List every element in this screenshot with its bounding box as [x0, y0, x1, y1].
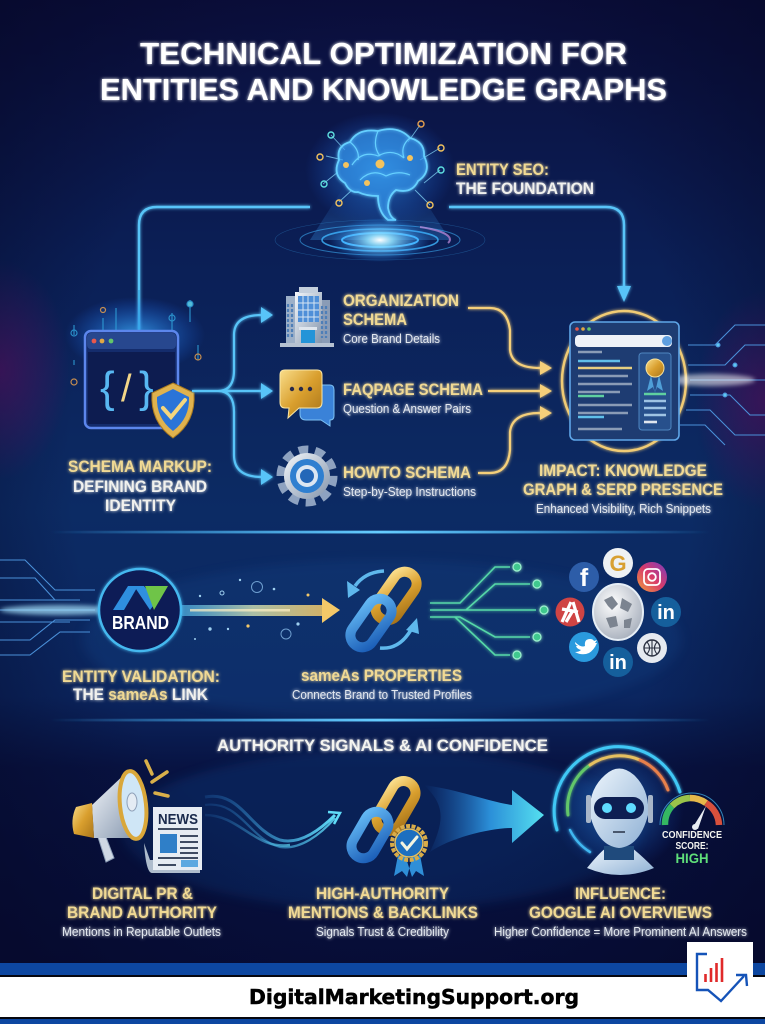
rings: [554, 747, 680, 852]
text: faqpage schema: [343, 381, 483, 416]
text: high-authority: MENTIONS & BACKLINKS: [288, 904, 478, 922]
holographic base rings: [275, 218, 485, 262]
text: high-authority: HIGH-AUTHORITY: [316, 885, 449, 903]
icon: brand circle: BRAND: [112, 613, 169, 633]
text: influence: GOOGLE AI OVERVIEWS: [529, 904, 712, 922]
icon: code window with shield: [65, 290, 205, 438]
text: high-authority: [288, 885, 478, 939]
icon: serp window with award: [562, 311, 765, 451]
text: faqpage schema: FAQPAGE SCHEMA: [343, 381, 483, 399]
footer url: DigitalMarketingSupport.org: [249, 985, 579, 1009]
icon: red profile: [556, 598, 584, 626]
text: howto schema: HOWTO SCHEMA: [343, 464, 471, 482]
browser frame: [570, 322, 679, 440]
heading: impact: Enhanced Visibility, Rich Snippets: [536, 502, 711, 516]
decorative data nodes: [71, 290, 201, 385]
text: influence: Higher Confidence = More Prominent AI Answers: [494, 925, 747, 939]
icon: faq chat bubbles: [280, 370, 334, 426]
text: organization schema: Core Brand Details: [343, 332, 440, 346]
brain network links: [323, 125, 440, 205]
gauge: confidence score: [660, 793, 724, 866]
heading: impact: GRAPH & SERP PRESENCE: [523, 481, 723, 499]
icon: twitter: [569, 632, 599, 662]
code braces: [100, 363, 154, 412]
icon: instagram: [637, 562, 667, 592]
shield: [152, 383, 194, 438]
icon: brand circle: [0, 569, 181, 651]
heading: impact: IMPACT: KNOWLEDGE: [539, 462, 707, 480]
seal ribbons: [394, 855, 424, 877]
connector: foundation to impact: [449, 207, 631, 302]
icon: linkedin bottom: in: [609, 652, 627, 674]
title: [100, 36, 667, 107]
text: sameas properties: sameAs PROPERTIES: [301, 667, 462, 685]
heading: schema markup: DEFINING BRAND: [73, 478, 207, 496]
confidence label: CONFIDENCE: [662, 829, 722, 841]
circuit lines right: [680, 325, 765, 445]
heading: impact: [523, 462, 723, 516]
text: faqpage schema: Question & Answer Pairs: [343, 402, 471, 416]
text: digital pr: Mentions in Reputable Outlets: [62, 925, 221, 939]
award panel: [639, 353, 671, 430]
arrow: brand to sameAs: [182, 579, 340, 640]
icon: facebook: f: [580, 564, 589, 592]
brain outline: [337, 129, 427, 220]
text: howto schema: Step-by-Step Instructions: [343, 485, 476, 499]
text: influence: INFLUENCE:: [575, 885, 666, 903]
result lines: [578, 352, 632, 429]
arrows: schema types to impact: [468, 308, 552, 473]
text: digital pr: [62, 885, 221, 939]
shoulders and neck: [587, 848, 654, 875]
text: sameas properties: [292, 667, 472, 702]
heading: entity validation: ENTITY VALIDATION:: [62, 668, 220, 686]
text: digital pr: DIGITAL PR &: [92, 885, 193, 903]
newspaper: NEWS: [158, 811, 198, 828]
icon: ai robot: [552, 741, 684, 875]
heading: entity seo: ENTITY SEO:: [456, 161, 549, 179]
confidence label: [662, 829, 722, 866]
text: howto schema: [343, 464, 476, 499]
network lines: link to profiles: [430, 563, 548, 659]
logo: [687, 942, 753, 1001]
heading: schema markup: IDENTITY: [105, 497, 176, 515]
heading: entity validation: [62, 668, 220, 704]
text: sameas properties: Connects Brand to Trusted Profiles: [292, 688, 472, 702]
text: organization schema: [343, 292, 459, 346]
brain nodes: [317, 121, 444, 208]
icon: chain link with arrows: [346, 567, 421, 652]
brand logo mark: [113, 586, 168, 610]
browser window: [85, 331, 178, 428]
text: digital pr: BRAND AUTHORITY: [67, 904, 217, 922]
icon: organization building: [280, 287, 334, 347]
heading: authority signals: AUTHORITY SIGNALS & AI CONFIDENCE: [217, 736, 548, 755]
megaphone: [72, 761, 168, 862]
icon cluster: social profiles: [556, 548, 681, 677]
icon: chain link with seal: [347, 777, 426, 877]
text: influence: [494, 885, 747, 939]
heading: entity seo: [456, 161, 594, 198]
heading: entity validation: THE sameAs LINK: [73, 686, 208, 704]
divider middle: [50, 719, 710, 721]
code braces: {: [100, 363, 115, 412]
arrows: schema markup to schema types: [192, 307, 273, 485]
title: TECHNICAL OPTIMIZATION FOR: [140, 36, 627, 71]
heading: schema markup: [68, 458, 212, 515]
arrow: wave from digital pr to link: [205, 796, 340, 847]
confidence label: HIGH: [676, 850, 708, 866]
divider top: [50, 531, 710, 533]
code braces: }: [139, 363, 154, 412]
text: high-authority: Signals Trust & Credibility: [316, 925, 450, 939]
arrow: link to ai overviews: [424, 785, 544, 852]
heading: schema markup: SCHEMA MARKUP:: [68, 458, 212, 476]
icon: holographic brain: [275, 112, 485, 262]
code braces: /: [121, 368, 132, 410]
icon: linkedin right: in: [657, 602, 675, 624]
icon: wikipedia globe: [593, 584, 643, 640]
text: organization schema: ORGANIZATION: [343, 292, 459, 310]
head: [590, 768, 648, 848]
icon: gear: [281, 450, 333, 502]
text: organization schema: SCHEMA: [343, 311, 407, 329]
icon: google: G: [609, 551, 627, 576]
icon: globe: [637, 633, 667, 663]
decorative left circuit: [0, 560, 95, 655]
particles: [194, 579, 310, 640]
heading: entity seo: THE FOUNDATION: [456, 180, 594, 198]
footer band: [0, 963, 765, 1024]
title: ENTITIES AND KNOWLEDGE GRAPHS: [100, 72, 667, 107]
confidence label: SCORE:: [676, 840, 708, 852]
connector: foundation to schema markup: [139, 207, 310, 330]
icon: megaphone with newspaper: [72, 761, 202, 873]
